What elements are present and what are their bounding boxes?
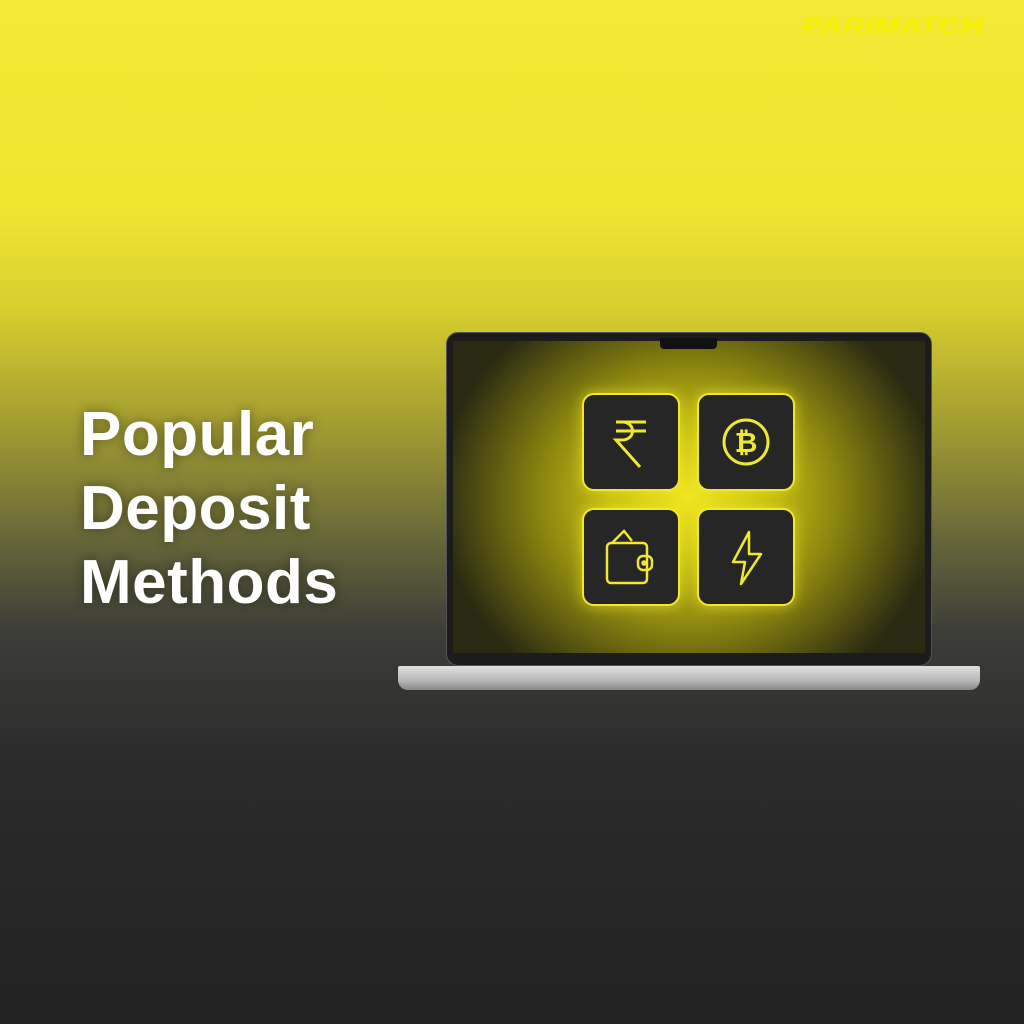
title: Popular	[80, 400, 314, 469]
title	[78, 400, 338, 617]
laptop base	[398, 666, 980, 690]
laptop lid	[446, 332, 932, 666]
title: Deposit	[80, 474, 311, 543]
icon: lightning	[697, 508, 795, 606]
screen	[453, 341, 925, 653]
laptop	[398, 332, 980, 690]
icon: bitcoin: ₿	[735, 427, 757, 458]
logo: PARIMATCH	[802, 13, 983, 40]
icon: rupee	[582, 393, 680, 491]
title: Methods	[80, 548, 338, 617]
icon: bitcoin	[697, 393, 795, 491]
icon: wallet	[582, 508, 680, 606]
notch	[660, 338, 717, 349]
